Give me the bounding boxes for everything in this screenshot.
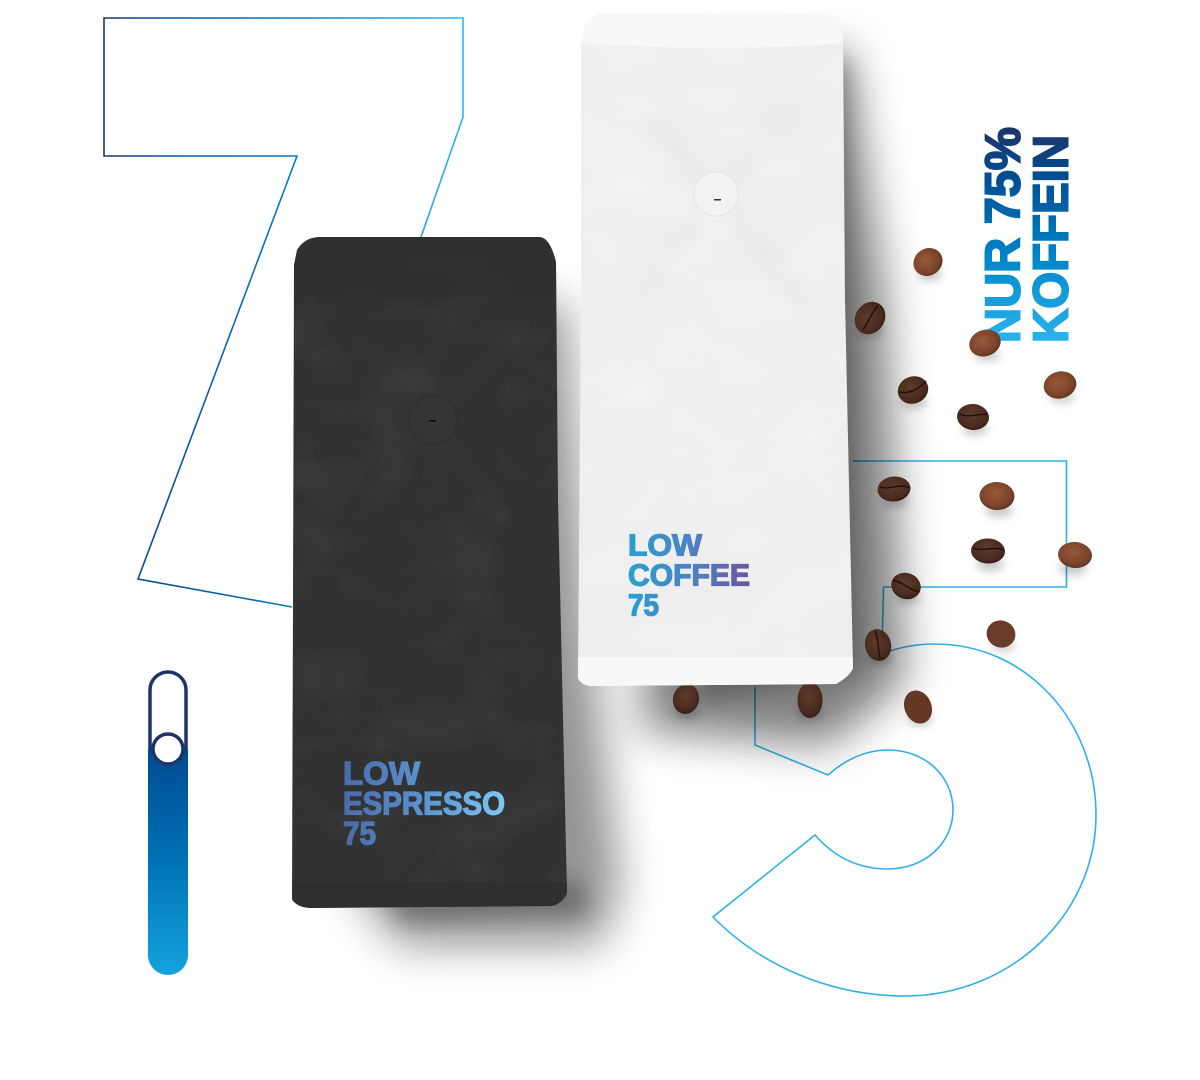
label: low espresso 75: ESPRESSO	[343, 786, 505, 822]
caffeine heading: KOFFEIN	[1024, 135, 1078, 343]
bean 4	[894, 372, 932, 408]
bean 9	[970, 538, 1006, 571]
label: low coffee 75: 75	[628, 588, 659, 622]
bean 16	[798, 682, 822, 719]
caffeine level gauge	[148, 672, 188, 975]
bean over heading	[966, 325, 1004, 361]
bag shadows	[350, 50, 905, 945]
bean 3	[966, 325, 1004, 361]
caffeine heading: NUR 75%	[976, 127, 1030, 343]
valve	[409, 396, 457, 444]
bean 8	[979, 481, 1015, 517]
bean 11	[887, 569, 925, 604]
bean 5	[956, 403, 990, 435]
bean 12	[862, 627, 894, 664]
bag: low coffee (white)	[575, 5, 860, 690]
label: low espresso 75: LOW	[343, 756, 421, 792]
bean 2	[848, 296, 892, 340]
infographic canvas	[103, 13, 1097, 997]
outline numeral 7	[104, 18, 463, 607]
label: low coffee 75	[628, 528, 750, 622]
bean 13	[983, 616, 1019, 652]
outline numeral 5	[713, 461, 1096, 996]
bean 1	[908, 242, 948, 282]
label: low coffee 75: COFFEE	[628, 558, 750, 592]
bean 15	[670, 681, 702, 718]
bag: low espresso (black)	[290, 235, 570, 910]
bean 6	[1041, 368, 1079, 403]
label: low espresso 75	[343, 756, 505, 852]
label: low coffee 75: LOW	[628, 528, 703, 562]
label: low espresso 75: 75	[343, 816, 376, 852]
bean 7	[876, 475, 912, 507]
bean 14	[899, 686, 937, 728]
caffeine heading	[976, 127, 1078, 343]
bean 10	[1057, 541, 1093, 575]
valve	[694, 172, 738, 216]
coffee beans	[670, 242, 1093, 728]
